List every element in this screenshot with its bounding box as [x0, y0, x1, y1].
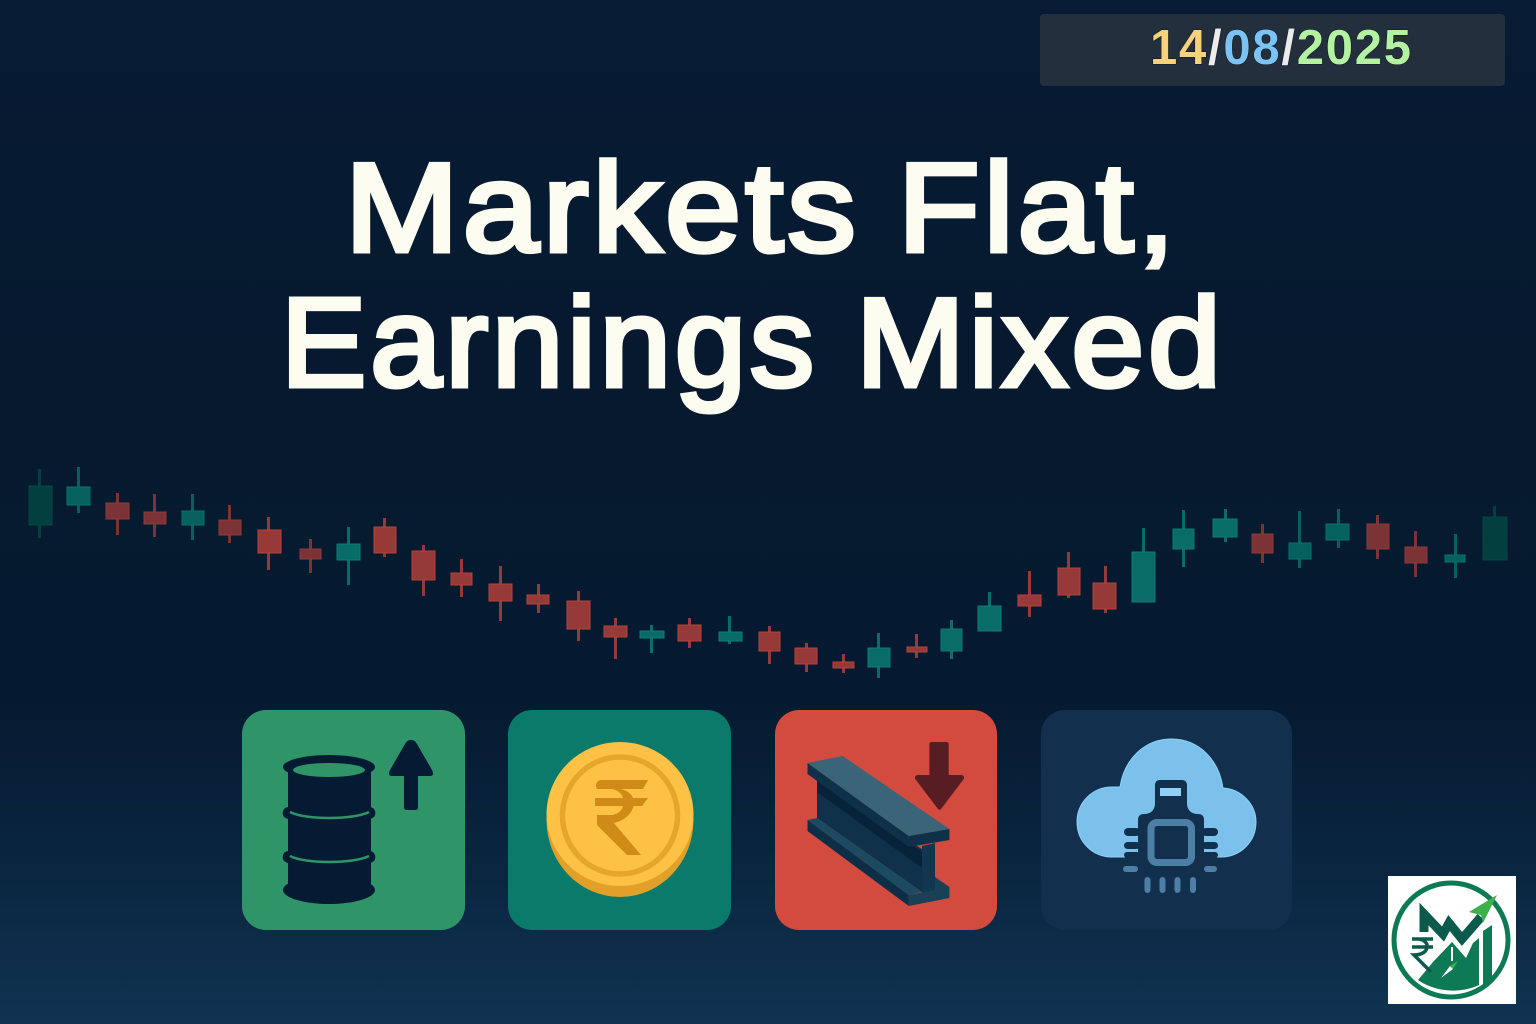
date badge [1040, 14, 1505, 86]
icon: rupee coin [546, 742, 694, 897]
rupee symbol [595, 780, 648, 855]
icon: cloud with chip [1077, 739, 1256, 893]
logo mountain and bars [1418, 925, 1492, 991]
logo arrow [1469, 895, 1497, 923]
candlestick chart [29, 467, 1507, 678]
title line 1: Markets [345, 137, 860, 278]
panel: steel down [775, 710, 997, 930]
panel: cloud tech [1041, 710, 1292, 930]
logo [1388, 876, 1516, 1004]
logo compass needle [1441, 947, 1458, 978]
title [281, 137, 1225, 413]
date text: 14/08/2025 [1150, 21, 1411, 75]
icon: up arrow [389, 740, 433, 810]
logo zigzag [1424, 914, 1481, 939]
icon: down arrow [915, 742, 964, 810]
panel: rupee [508, 710, 731, 930]
title line 1: Flat, [898, 137, 1179, 278]
icon: steel i-beam [808, 756, 949, 906]
title line 2: Earnings [281, 272, 818, 413]
title line 2: Mixed [856, 272, 1225, 413]
panel: oil up [242, 710, 465, 930]
chip cutout [1138, 780, 1204, 860]
logo rupee [1412, 939, 1433, 972]
icon: oil barrel [283, 755, 375, 904]
